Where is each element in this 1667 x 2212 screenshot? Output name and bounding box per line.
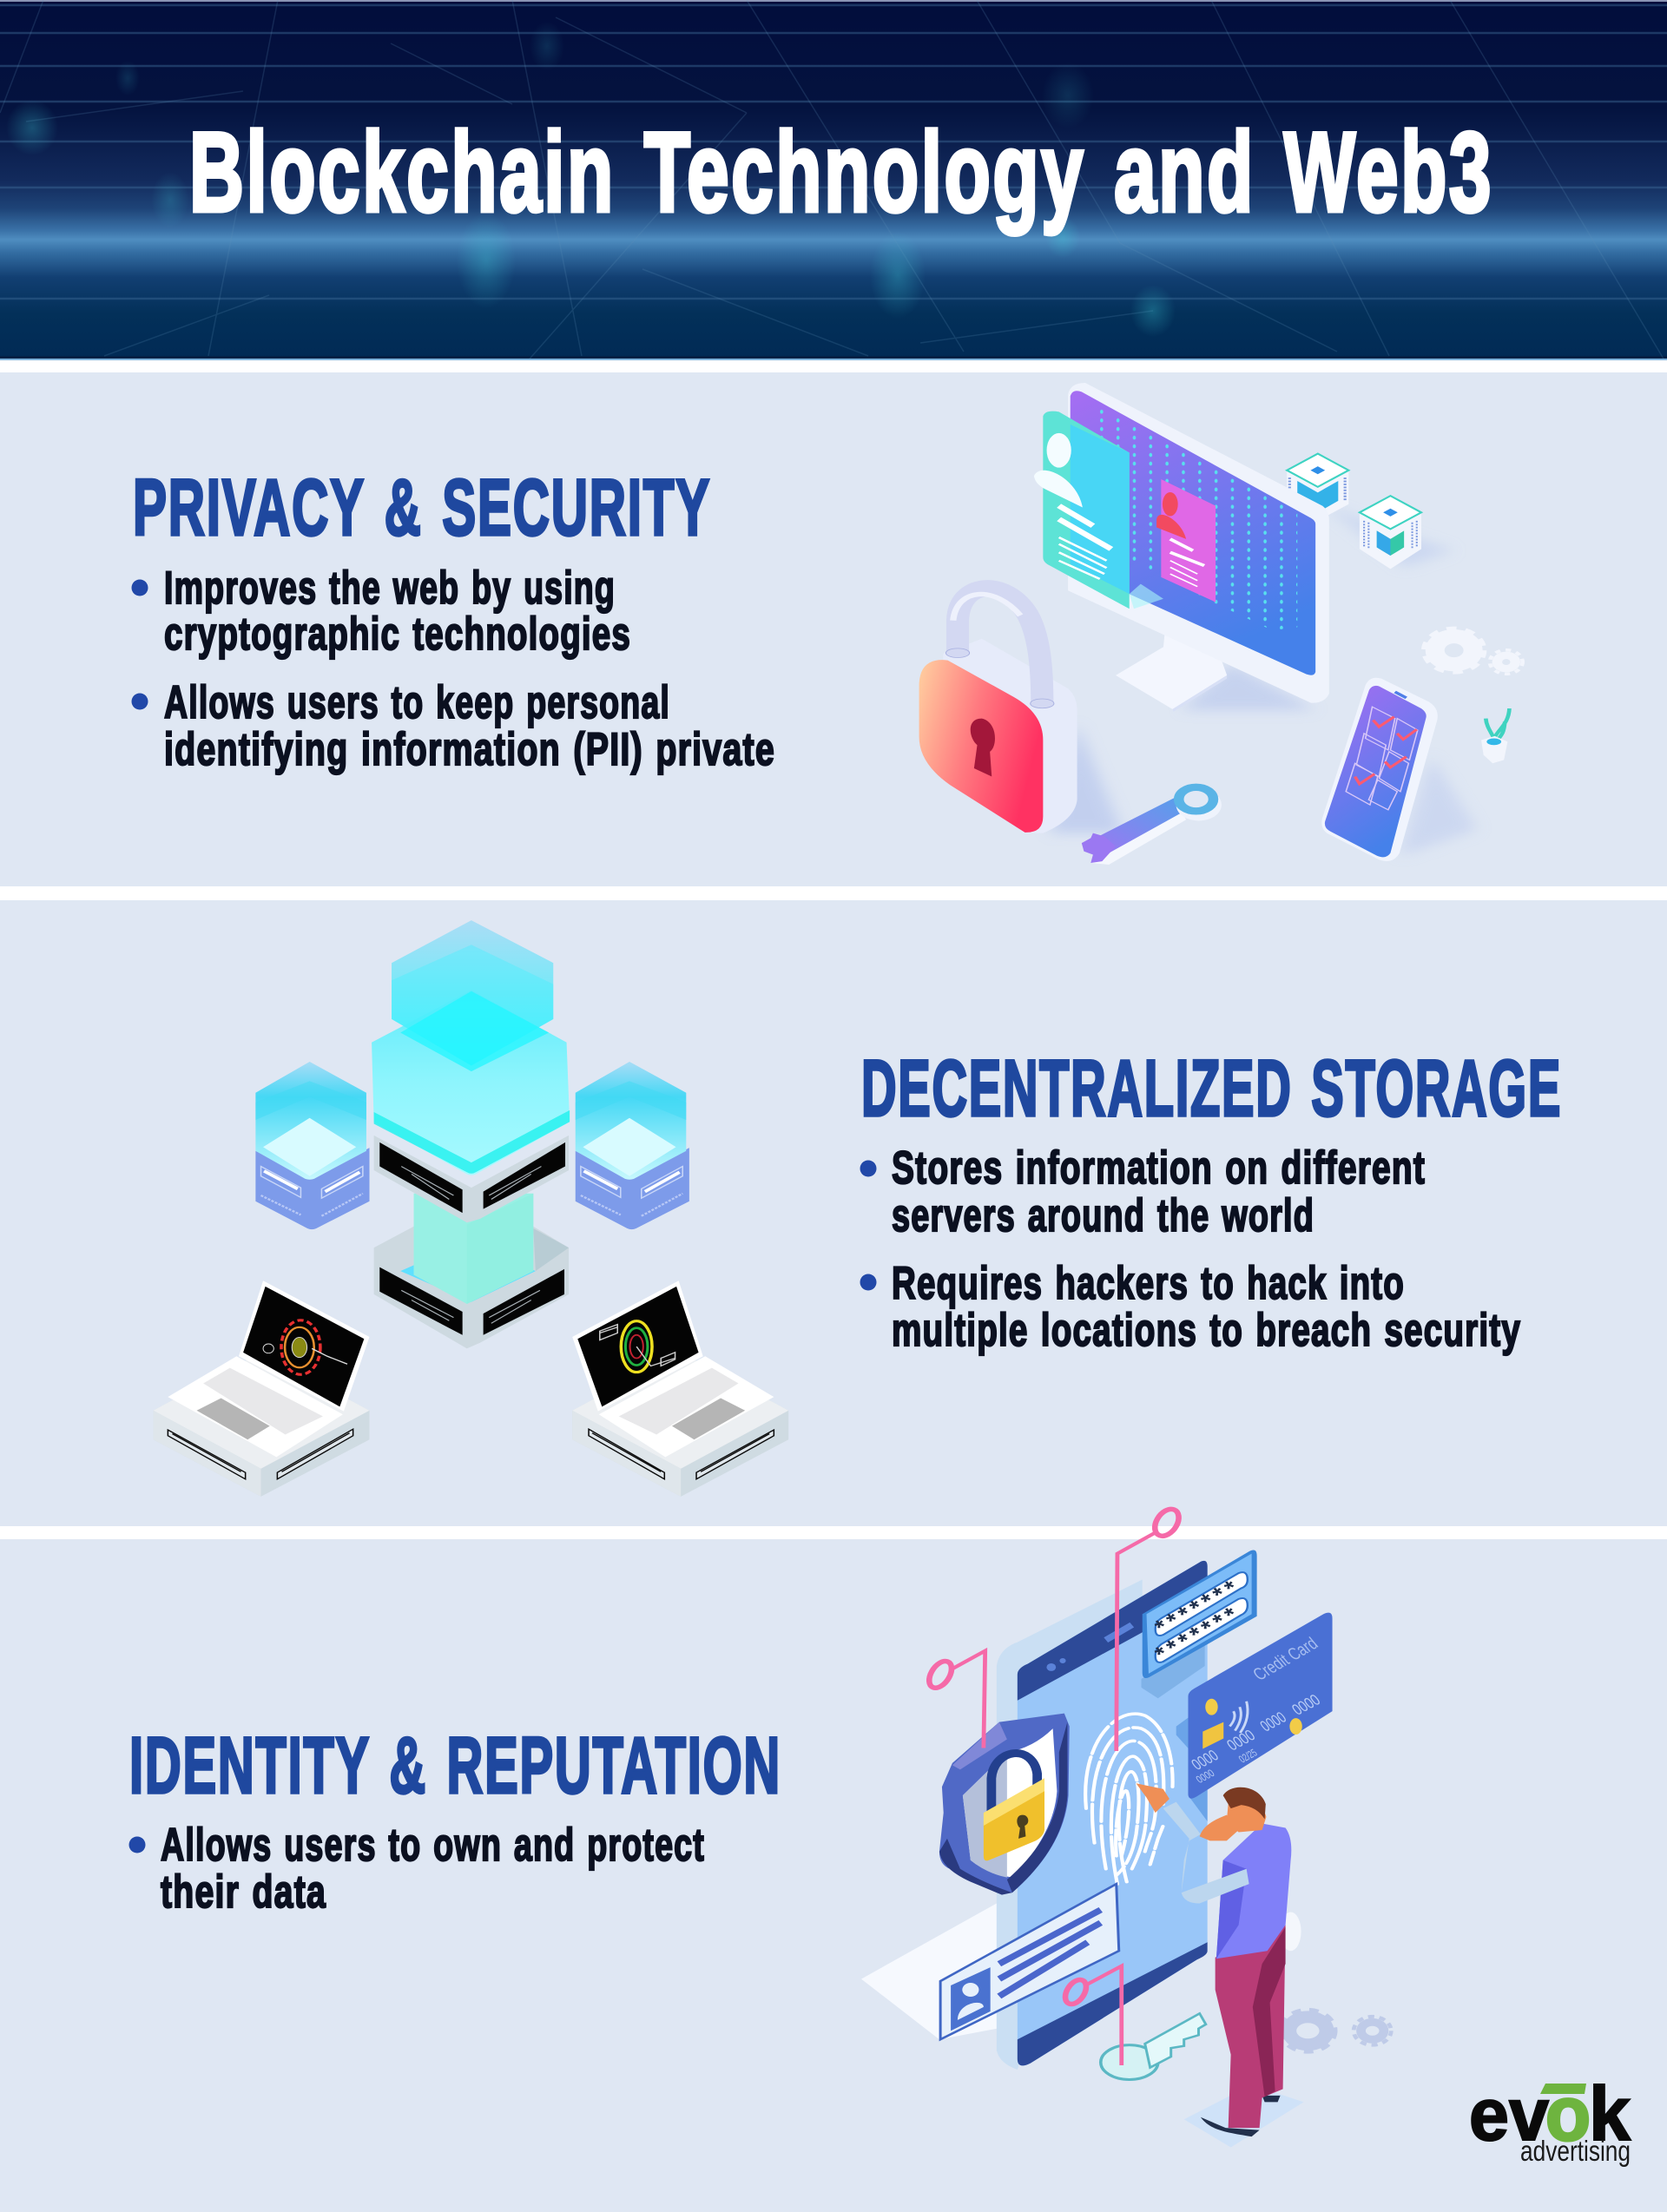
storage block right — [576, 1062, 689, 1229]
illustration: identity verification — [861, 1506, 1391, 2148]
icon: credit card: 0000 — [1257, 1709, 1290, 1735]
pink connector lines — [925, 1506, 1183, 2065]
icon: fingerprint — [1085, 1714, 1173, 1884]
icon: password card: ******* — [1150, 1603, 1243, 1665]
header banner — [0, 0, 1667, 360]
icon: credit card: 0000 — [1223, 1727, 1259, 1754]
icon: password card — [1142, 1550, 1257, 1698]
id card — [940, 1884, 1119, 2039]
bullet list: storage — [860, 1142, 1521, 1356]
server tower lower — [374, 1194, 569, 1348]
bullet list: storage: servers around the world — [892, 1190, 1314, 1241]
server tower upper — [372, 990, 570, 1222]
heading: identity and reputation: IDENTITY & REPUTATION — [129, 1722, 781, 1810]
bullet list: storage: Requires hackers to hack into — [892, 1258, 1405, 1309]
logo: evok advertising: k — [1589, 2070, 1631, 2156]
icon: shield with padlock — [939, 1714, 1070, 1895]
icon: credit card — [1188, 1613, 1333, 1799]
bullet list: privacy: identifying information (PII) private — [164, 724, 775, 775]
person — [1137, 1783, 1304, 2148]
bullet list: privacy: Improves the web by using — [164, 563, 616, 614]
icon: password card: ******* — [1150, 1576, 1243, 1639]
icon: padlock — [919, 589, 1077, 833]
icon: computer monitor — [1034, 383, 1329, 712]
icon: key — [1082, 787, 1222, 865]
panel: privacy and security — [0, 372, 1667, 886]
icon: gears — [1281, 2010, 1391, 2051]
icon: smartphone — [1321, 678, 1438, 861]
logo: evok advertising — [1469, 2070, 1631, 2167]
heading: privacy and security: PRIVACY & SECURITY — [133, 464, 711, 552]
panel: decentralized storage — [0, 900, 1667, 1526]
panel: identity and reputation — [0, 1506, 1667, 2212]
logo: evok advertising: advertising — [1520, 2135, 1631, 2167]
bullet list: privacy: cryptographic technologies — [164, 609, 631, 660]
icon: key — [1101, 2013, 1206, 2079]
icon: server cubes — [1287, 454, 1454, 569]
icon: credit card: 02/25 — [1236, 1747, 1260, 1765]
storage block left — [255, 1062, 370, 1229]
icon: pink profile card — [1156, 479, 1216, 602]
bullet list: identity: Allows users to own and protect — [161, 1820, 705, 1871]
bullet list: identity: their data — [161, 1866, 326, 1918]
illustration: security isometric scene — [919, 383, 1523, 865]
laptop left — [154, 1280, 370, 1497]
logo: evok advertising: o — [1545, 2070, 1591, 2156]
glowing top block — [392, 920, 553, 1071]
icon: credit card: 0000 — [1194, 1767, 1217, 1786]
bullet list: privacy — [132, 563, 775, 775]
icon: gears — [1424, 629, 1523, 674]
icon: credit card: Credit Card — [1249, 1634, 1321, 1684]
bullet list: storage: Stores information on different — [892, 1142, 1426, 1194]
icon: teal profile card — [1034, 411, 1163, 609]
icon: credit card: 0000 — [1189, 1747, 1222, 1774]
bullet list: identity — [128, 1820, 705, 1918]
bullet list: privacy: Allows users to keep personal — [164, 677, 670, 728]
logo: evok advertising: ev — [1469, 2074, 1549, 2156]
illustration: decentralized network — [154, 920, 788, 1497]
laptop right — [572, 1280, 788, 1497]
icon: potted plant — [1481, 708, 1509, 763]
icon: credit card: 0000 — [1288, 1691, 1324, 1719]
